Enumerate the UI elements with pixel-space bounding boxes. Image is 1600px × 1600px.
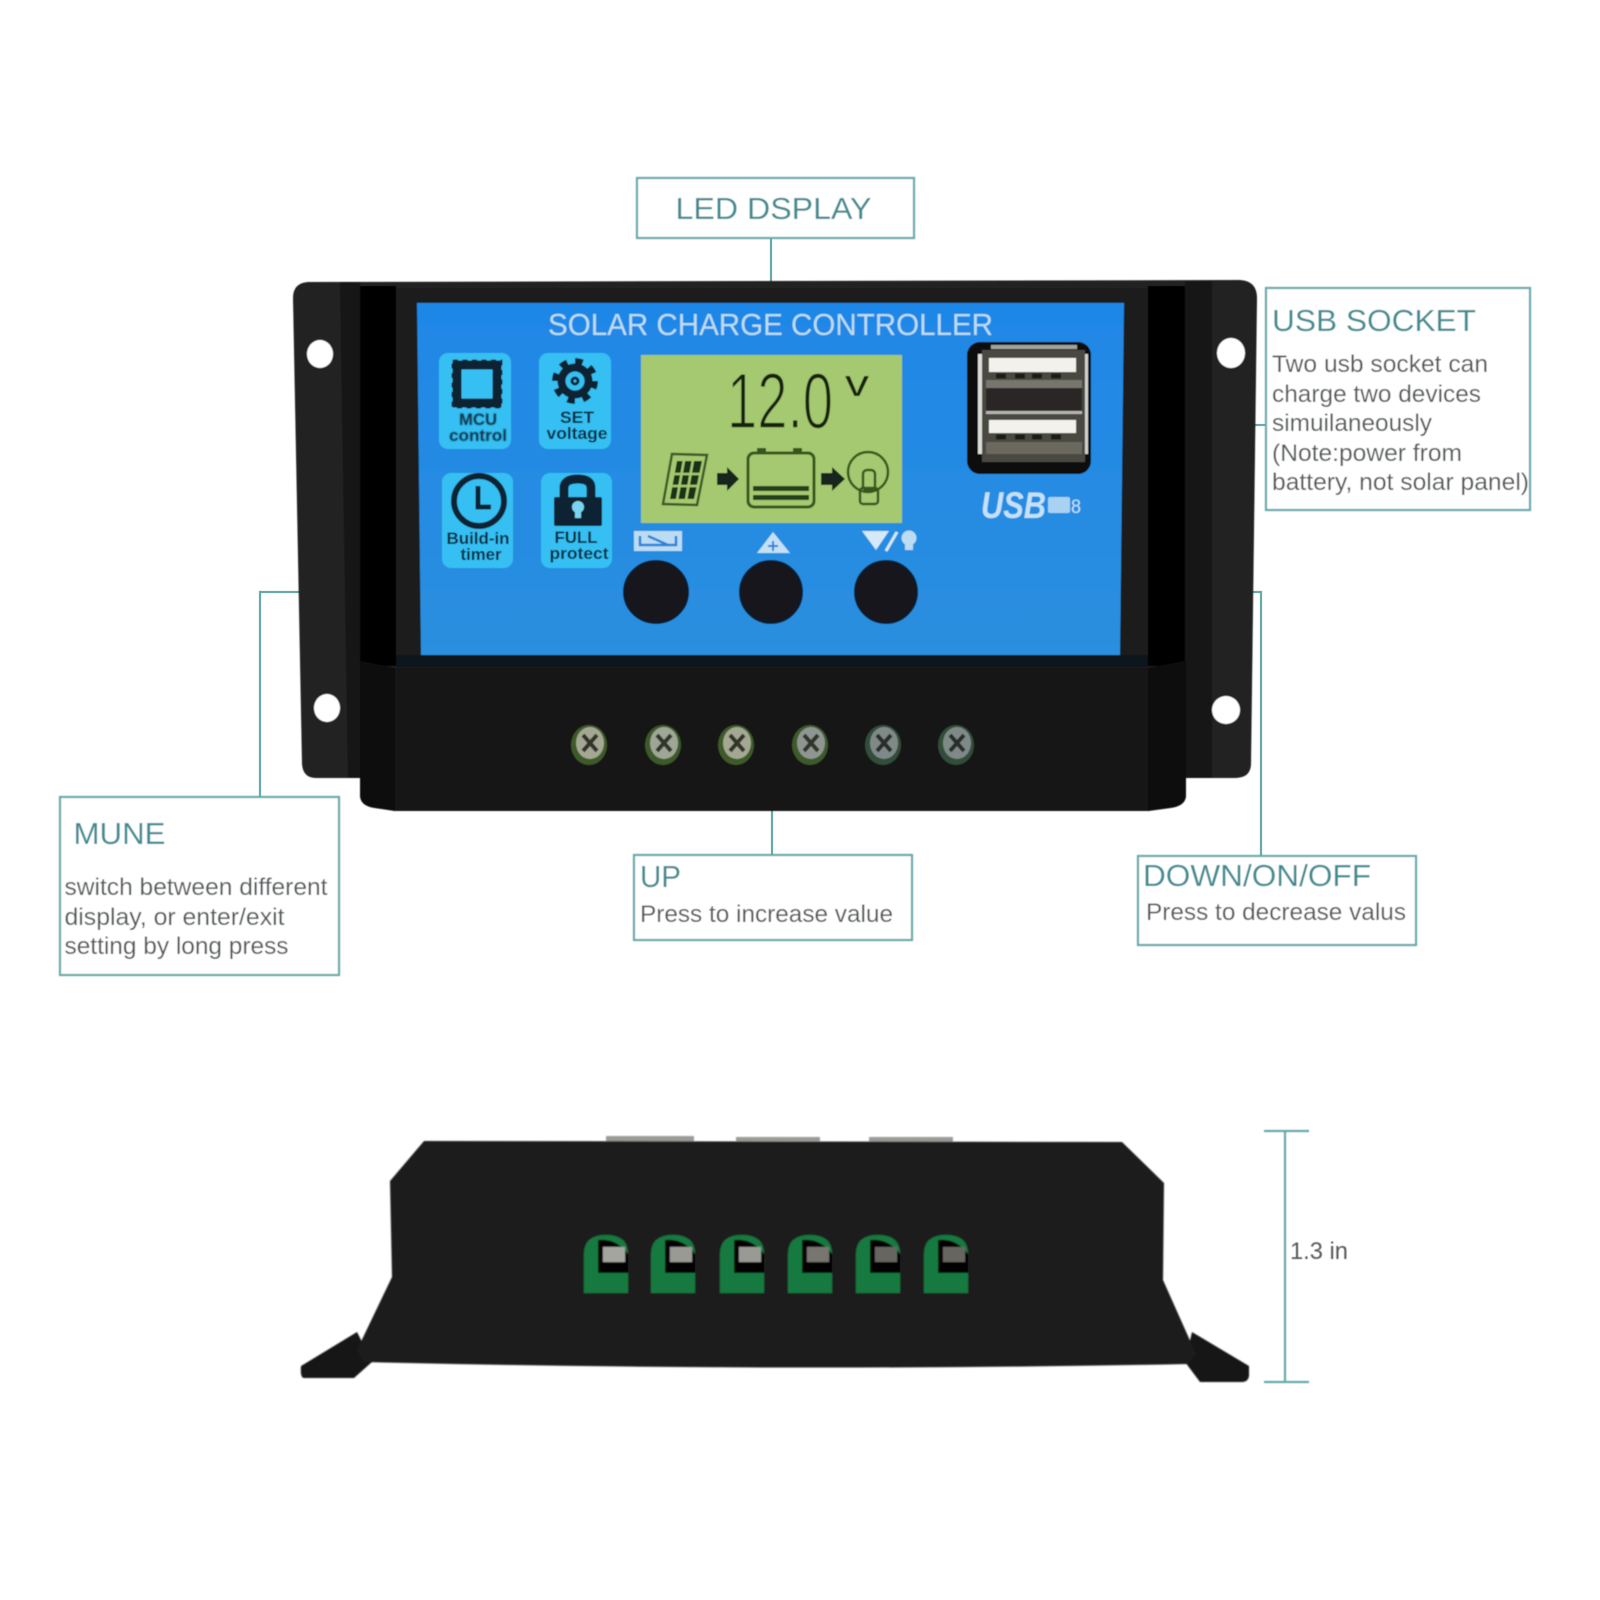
housing body around faceplate: [396, 288, 1148, 668]
callout body: Press to decrease valus: [1146, 899, 1406, 926]
mounting hole: lower right: [1212, 696, 1240, 724]
USB logo text: USB: [981, 485, 1046, 526]
side view of controller: [301, 1136, 1249, 1382]
cover right bevel: [1148, 661, 1186, 811]
icon: clock: [454, 476, 504, 526]
terminal screw 6: [938, 725, 974, 765]
terminal slot 1: [584, 1235, 628, 1293]
right housing black band: [1148, 286, 1185, 666]
terminal slot 4: [788, 1235, 832, 1293]
button symbol: menu: [634, 531, 682, 551]
callout body: switch between different: [64, 874, 328, 901]
label: MCU control: MCU: [459, 410, 497, 429]
callout: menu button: [60, 797, 339, 975]
terminal screw 2: [645, 725, 681, 765]
label: Build-in timer: Build-in: [446, 529, 510, 548]
tile: full protect: [541, 473, 612, 568]
callout body: battery, not solar panel): [1272, 469, 1529, 496]
label: MCU control: control: [449, 426, 507, 445]
mounting flange: [293, 280, 1257, 778]
blue faceplate: [417, 303, 1124, 655]
label: Build-in timer: timer: [460, 545, 502, 564]
upper port tongue: [989, 358, 1076, 372]
label: FULL protect: FULL: [554, 528, 598, 547]
lower port tongue: [989, 420, 1076, 433]
terminal screw 3: [718, 725, 754, 765]
label: SET voltage: voltage: [546, 424, 608, 443]
connector: up button: [771, 808, 773, 855]
callout body: simuilaneously: [1272, 410, 1432, 437]
callout body: display, or enter/exit: [64, 904, 285, 931]
terminal slot 5: [856, 1235, 900, 1293]
callout heading: DOWN/ON/OFF: [1143, 858, 1371, 893]
cover left bevel: [360, 661, 395, 811]
callout heading: LED DSPLAY: [676, 191, 872, 226]
button: up: [740, 561, 802, 623]
USB logo text: 8: [1071, 497, 1081, 518]
button symbol: down / light: [862, 530, 916, 551]
top buttons seen from side: [606, 1136, 953, 1142]
arrow: battery to load: [821, 467, 845, 491]
tile: SET voltage: [539, 353, 611, 449]
callout body: charge two devices: [1272, 381, 1481, 408]
dimension marker: height: [1264, 1131, 1348, 1382]
terminal slot 2: [651, 1235, 695, 1293]
connector: USB socket to controller: [1254, 424, 1266, 426]
USB sockets: [967, 342, 1091, 474]
terminal slot 6: [924, 1235, 968, 1293]
LCD display: [641, 355, 902, 523]
icon: battery: [748, 448, 814, 507]
terminal screw 5: [865, 725, 901, 765]
icon: solar panel: [663, 454, 707, 505]
left foot: [301, 1332, 372, 1378]
connector: menu button: [260, 592, 300, 797]
callout heading: UP: [640, 859, 681, 894]
icon: gear: [555, 361, 595, 401]
icon: chip: [453, 361, 501, 407]
callout: up button: [634, 855, 912, 940]
button: menu: [624, 561, 688, 623]
shadow band under faceplate: [396, 655, 1148, 667]
terminal slot 3: [720, 1235, 764, 1293]
callout: LED display: [637, 178, 914, 238]
callout body: setting by long press: [64, 933, 288, 960]
right foot: [1185, 1332, 1249, 1382]
callout: USB socket: [1266, 288, 1530, 510]
left housing black band: [360, 286, 396, 666]
callout heading: USB SOCKET: [1272, 303, 1476, 338]
label: SET voltage: SET: [560, 408, 595, 427]
panel title: SOLAR CHARGE CONTROLLER: [548, 308, 993, 342]
terminal cover: [360, 661, 1186, 811]
button: down: [855, 561, 917, 623]
voltage reading: 12.0: [727, 356, 833, 445]
icon: light bulb: [848, 452, 888, 504]
tile: MCU control: [439, 353, 511, 449]
tile: build-in timer: [442, 473, 513, 568]
front view of solar charge controller: [293, 280, 1257, 811]
label: FULL protect: protect: [550, 544, 609, 563]
terminal screw 1: [571, 725, 607, 765]
side body: [357, 1141, 1196, 1368]
callout body: Two usb socket can: [1272, 351, 1488, 378]
callout: down/on/off button: [1138, 856, 1416, 945]
mounting hole: upper left: [307, 340, 333, 368]
right flange stripe: [1185, 281, 1212, 778]
callout body: Press to increase value: [640, 901, 893, 928]
callout body: (Note:power from: [1272, 440, 1462, 467]
dimension label: 1.3 in: [1290, 1238, 1348, 1265]
arrow: panel to battery: [717, 467, 739, 491]
mounting hole: upper right: [1217, 338, 1245, 368]
connector: down button: [1250, 592, 1261, 856]
callout heading: MUNE: [74, 816, 166, 851]
icon: padlock: [554, 479, 602, 526]
connector: LED display to controller: [770, 238, 772, 284]
unit: v: [845, 363, 869, 405]
mounting hole: lower left: [314, 694, 340, 722]
left inner flange shadow: [340, 282, 360, 778]
button symbol: up: [757, 532, 790, 553]
terminal screw 4: [792, 725, 828, 765]
